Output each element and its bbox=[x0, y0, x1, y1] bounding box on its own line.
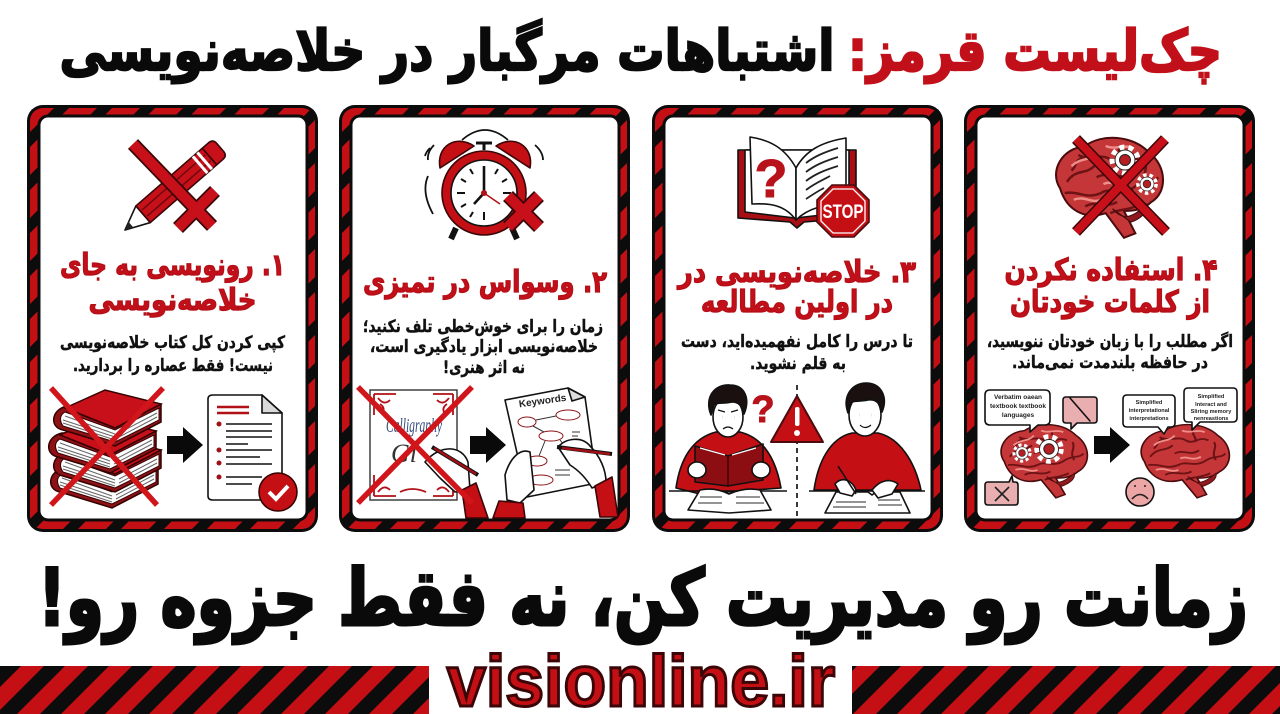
illustration: student writing notes bbox=[809, 383, 925, 513]
icon: calligraphy page crossed out: Calligraphy bbox=[386, 415, 442, 437]
body text bbox=[681, 332, 913, 374]
illustration: brain with simplified bubbles: Sliring memory bbox=[1191, 409, 1232, 415]
title red part: چک‌لیست قرمز: bbox=[848, 19, 1222, 84]
heading bbox=[1005, 253, 1218, 320]
body text: زمان را برای خوش‌خطی تلف نکنید؛ bbox=[363, 317, 603, 337]
icon: open book with stop sign: ? bbox=[754, 149, 788, 209]
illustration: brain with simplified bubbles: Simplified bbox=[1136, 400, 1163, 406]
icon: open book with stop sign: STOP bbox=[822, 202, 864, 223]
heading: از کلمات خودتان bbox=[1010, 285, 1210, 320]
illustration: brain with simplified bubbles bbox=[1123, 388, 1237, 506]
arrow bbox=[167, 427, 203, 463]
footer: right stripe band bbox=[852, 666, 1280, 714]
arrow bbox=[470, 427, 506, 463]
illustration: brain with simplified bubbles: interpretational bbox=[1129, 408, 1170, 414]
panel border bbox=[339, 105, 630, 532]
panel border bbox=[964, 105, 1255, 532]
icon: question mark: ? bbox=[751, 389, 775, 431]
heading: ۱. رونویسی به جای bbox=[60, 248, 285, 283]
body text bbox=[60, 333, 285, 376]
body text bbox=[987, 331, 1233, 373]
panel: mistake 1 bbox=[27, 105, 318, 532]
body text: نه اثر هنری! bbox=[443, 358, 525, 378]
panel border bbox=[27, 105, 318, 532]
body text: کپی کردن کل کتاب خلاصه‌نویسی bbox=[60, 333, 285, 353]
illustration: brain with verbatim bubbles bbox=[985, 390, 1097, 505]
illustration: brain with verbatim bubbles: textbook textbook bbox=[990, 403, 1046, 410]
heading: در اولین مطالعه bbox=[701, 285, 893, 320]
body text: تا درس را کامل نفهمیده‌اید، دست bbox=[681, 332, 913, 352]
illustration: confused student reading bbox=[669, 385, 787, 513]
heading: ۳. خلاصه‌نویسی در bbox=[676, 255, 916, 290]
icon: crossed pencil bbox=[118, 139, 227, 238]
icon: calligraphy page crossed out bbox=[358, 387, 488, 518]
icon: alarm clock bbox=[425, 130, 543, 239]
divider with warning triangle bbox=[771, 385, 823, 516]
title black part: اشتباهات مرگبار در خلاصه‌نویسی bbox=[60, 19, 834, 84]
footer: left stripe band bbox=[0, 666, 429, 714]
illustration: brain with simplified bubbles: Simplified bbox=[1198, 394, 1225, 400]
illustration: brain with simplified bubbles: Interact and bbox=[1195, 402, 1227, 408]
title bbox=[60, 19, 1222, 84]
icon: keyword map with hands: Keywords bbox=[518, 393, 568, 410]
panel border bbox=[652, 105, 943, 532]
icon: keyword map with hands bbox=[493, 388, 618, 518]
heading: ۲. وسواس در تمیزی bbox=[363, 265, 607, 300]
heading bbox=[676, 255, 916, 320]
body text: نیست! فقط عصاره را بردارید. bbox=[73, 356, 273, 376]
icon: brain crossed out bbox=[1056, 138, 1166, 238]
icon: calligraphy page crossed out: Gl bbox=[391, 439, 417, 468]
panel: mistake 4 bbox=[964, 105, 1255, 532]
illustration: brain with verbatim bubbles: Verbatim oaean bbox=[994, 394, 1042, 401]
body text: به قلم نشوید. bbox=[750, 354, 846, 374]
illustration: brain with verbatim bubbles: languages bbox=[1002, 412, 1034, 419]
illustration: brain with simplified bubbles: nenreastions bbox=[1194, 416, 1228, 422]
heading: ۴. استفاده نکردن bbox=[1005, 253, 1218, 288]
body text bbox=[363, 317, 603, 378]
arrow bbox=[1094, 427, 1130, 463]
panel: mistake 2 bbox=[339, 105, 630, 532]
icon: summary document with check bbox=[208, 395, 297, 511]
icon: open book with stop sign bbox=[738, 137, 869, 237]
icon: crossed out book stack bbox=[49, 388, 163, 508]
heading bbox=[60, 248, 285, 318]
illustration: brain with simplified bubbles: interpretations bbox=[1129, 416, 1169, 422]
heading: خلاصه‌نویسی bbox=[88, 283, 256, 318]
panel: mistake 3 bbox=[652, 105, 943, 532]
body text: در حافظه بلندمدت نمی‌ماند. bbox=[1012, 353, 1208, 373]
body text: خلاصه‌نویسی ابزار یادگیری است، bbox=[370, 336, 598, 357]
